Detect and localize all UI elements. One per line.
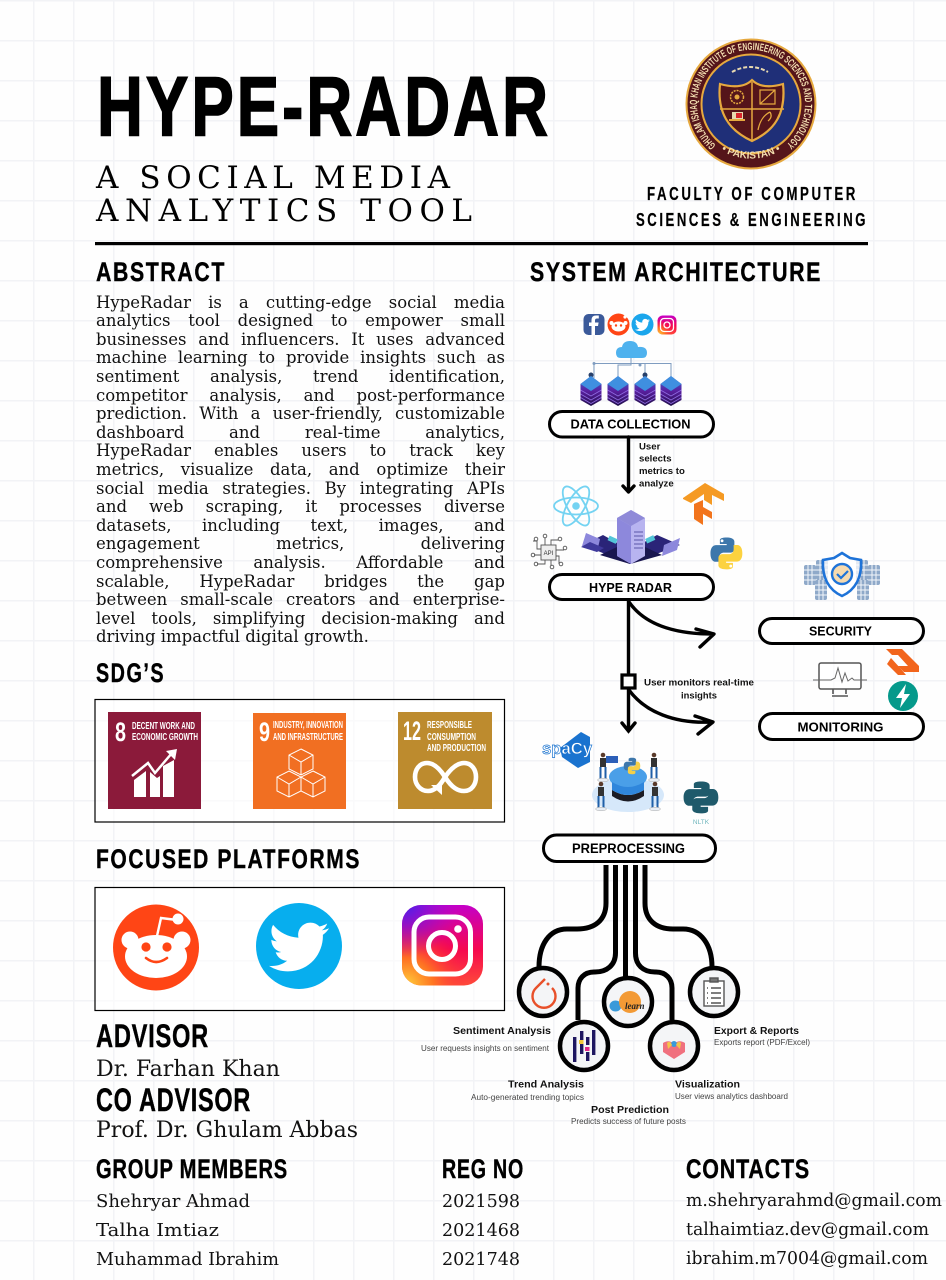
abstract text: machine learning to provide insights such as: [96, 348, 505, 367]
group members: Shehryar Ahmad: [96, 1191, 250, 1212]
SDG 9 tile: [253, 713, 346, 809]
heading: system architecture: SYSTEM ARCHITECTURE: [530, 257, 822, 287]
abstract text: HypeRadar enables users to track key: [96, 441, 505, 460]
header divider: [95, 242, 868, 245]
pill: security: [760, 618, 924, 644]
pill: data collection: DATA COLLECTION: [570, 416, 690, 432]
SDG 8 tile: ECONOMIC GROWTH: [132, 732, 198, 743]
university logo: • PAKISTAN •: [722, 147, 780, 159]
university logo: GHULAM ISHAQ KHAN INSTITUTE OF ENGINEERING SCIENCES AND TECHNOLOGY: [690, 42, 812, 150]
icon: NLTK: [684, 781, 718, 826]
abstract text: driving impactful digital growth.: [96, 627, 369, 646]
icon: fastapi: [888, 681, 918, 711]
registration numbers: [442, 1154, 524, 1270]
node marker: [622, 675, 635, 688]
output: export and reports: Exports report (PDF/Excel): [714, 1038, 810, 1047]
arrow note: user selects metrics: metrics to: [639, 466, 685, 477]
icon: reddit: [113, 904, 199, 990]
SDG 12 tile: 12: [403, 716, 421, 746]
output: post prediction: Post Prediction: [591, 1104, 669, 1116]
icon: API chip: [531, 534, 567, 569]
co advisor: Prof. Dr. Ghulam Abbas: [96, 1118, 358, 1143]
abstract text: prediction. With a user-friendly, customizable: [96, 404, 505, 423]
title: HYPE-RADAR: [97, 60, 551, 154]
abstract text: scalable, HypeRadar bridges the gap: [96, 572, 505, 591]
output: export and reports: Export & Reports: [714, 1025, 799, 1037]
SDG 8 tile: 8: [115, 717, 126, 747]
SDG 9 tile: INDUSTRY, INNOVATION: [273, 720, 343, 731]
contacts: [686, 1154, 942, 1269]
registration numbers: 2021748: [442, 1249, 520, 1270]
panel: focused platforms: [95, 888, 504, 1010]
subtitle: ANALYTICS TOOL: [95, 193, 472, 229]
abstract text: engagement metrics, delivering: [96, 534, 505, 553]
contacts: m.shehryarahmd@gmail.com: [686, 1190, 942, 1211]
abstract text: and web scraping, it processes diverse: [96, 497, 505, 516]
icon: scikit-learn: [610, 991, 645, 1013]
SDG 8 tile: DECENT WORK AND: [132, 721, 195, 732]
icon: dashboard book: [663, 1041, 685, 1059]
abstract text: level tools, simplifying decision-making and: [96, 609, 505, 628]
icon: central server: [581, 510, 680, 564]
arrow note: user selects metrics: [639, 442, 685, 490]
group members: Muhammad Ibrahim: [96, 1249, 279, 1270]
heading: SDGs: SDG’S: [96, 658, 165, 688]
faculty name: FACULTY OF COMPUTER: [647, 184, 858, 204]
group members: Talha Imtiaz: [96, 1220, 219, 1241]
pill: security: SECURITY: [809, 624, 872, 638]
SDG 8 tile: [108, 712, 201, 809]
abstract text: datasets, including text, images, and: [96, 516, 505, 535]
icon: python: [710, 537, 742, 569]
abstract text: analytics tool designed to empower small: [96, 311, 505, 330]
icon: websocket: [886, 649, 919, 675]
co advisor: CO ADVISOR: [96, 1082, 251, 1118]
advisor: [96, 1018, 280, 1082]
contacts: talhaimtiaz.dev@gmail.com: [686, 1219, 929, 1240]
panel: SDG goals: [95, 700, 504, 822]
abstract text: [96, 293, 505, 646]
icon: pytorch: [532, 979, 556, 1008]
co advisor: [96, 1082, 358, 1143]
icon: API chip: API: [544, 551, 554, 557]
SDG 9 tile: 9: [259, 717, 270, 747]
pill: preprocessing: PREPROCESSING: [572, 841, 685, 856]
abstract text: metrics, visualize data, and optimize their: [96, 460, 505, 479]
icon: spacy: spaCy: [542, 739, 593, 758]
contacts: CONTACTS: [686, 1154, 810, 1184]
abstract text: sentiment analysis, trend identification,: [96, 367, 505, 386]
SDG 12 tile: RESPONSIBLE: [427, 720, 472, 731]
faculty name: SCIENCES & ENGINEERING: [636, 210, 868, 230]
output: sentiment analysis: User requests insights on sentiment: [421, 1044, 550, 1053]
output: trend analysis: [471, 1022, 608, 1102]
faculty name: [636, 184, 868, 230]
abstract text: comprehensive analysis. Affordable and: [96, 553, 505, 572]
abstract text: between small-scale creators and enterprise-: [96, 590, 505, 609]
icon: scikit-learn: learn: [625, 1001, 645, 1011]
registration numbers: 2021598: [442, 1191, 520, 1212]
abstract text: competitor analysis, and post-performance: [96, 386, 505, 405]
abstract text: businesses and influencers. It uses advanced: [96, 330, 505, 349]
icon: react: [554, 483, 598, 529]
abstract text: HypeRadar is a cutting-edge social media: [96, 293, 505, 312]
icon: clipboard: [704, 978, 724, 1006]
arrows: hype radar branches: [622, 600, 714, 734]
icons: social sources: [584, 314, 676, 336]
arrow note: user monitors: User monitors real-time: [644, 678, 754, 688]
output: trend analysis: Trend Analysis: [508, 1078, 584, 1090]
icon: cloud and servers: [580, 341, 682, 406]
arrow note: user selects metrics: analyze: [639, 478, 674, 490]
connectors: preprocessing to outputs: [539, 865, 712, 1020]
output: visualization: User views analytics dashboard: [675, 1092, 788, 1101]
pill: data collection: [550, 412, 714, 437]
icon: bars: [573, 1030, 595, 1062]
contacts: ibrahim.m7004@gmail.com: [686, 1248, 928, 1269]
arrow note: user selects metrics: selects: [639, 454, 672, 464]
icon: twitter: [256, 903, 342, 989]
subtitle: [95, 160, 472, 229]
output: export and reports: [690, 968, 810, 1047]
advisor: ADVISOR: [96, 1018, 209, 1054]
arrow: data collection to hype radar: [623, 437, 634, 492]
pill: monitoring: MONITORING: [798, 720, 884, 734]
pill: hype radar: [550, 574, 714, 600]
pill: hype radar: HYPE RADAR: [589, 580, 673, 595]
icon: spacy: [542, 732, 593, 768]
arrow note: user monitors: [644, 678, 754, 702]
icon: instagram: [402, 905, 483, 986]
icon: NLTK: NLTK: [693, 819, 710, 826]
abstract text: social media strategies. By integrating APIs: [96, 479, 505, 498]
SDG 9 tile: AND INFRASTRUCTURE: [273, 732, 343, 743]
output: post prediction: [571, 978, 686, 1126]
subtitle: A SOCIAL MEDIA: [95, 160, 451, 196]
icon: security shield: [804, 553, 880, 600]
output: post prediction: Predicts success of future posts: [571, 1117, 686, 1126]
abstract text: dashboard and real-time analytics,: [96, 423, 505, 442]
icon: tensorflow: [683, 483, 724, 525]
output: visualization: Visualization: [675, 1078, 740, 1090]
output: trend analysis: Auto-generated trending topics: [471, 1093, 584, 1102]
advisor: Dr. Farhan Khan: [96, 1057, 280, 1082]
registration numbers: 2021468: [442, 1220, 520, 1241]
output: visualization: [650, 1022, 788, 1101]
arrow note: user selects metrics: User: [639, 442, 661, 452]
heading: abstract: ABSTRACT: [96, 257, 226, 287]
heading: focused platforms: FOCUSED PLATFORMS: [96, 844, 361, 874]
group members: GROUP MEMBERS: [96, 1154, 288, 1184]
arrow note: user monitors: insights: [681, 690, 717, 702]
pill: monitoring: [760, 714, 924, 740]
pill: preprocessing: [544, 835, 716, 862]
output: sentiment analysis: Sentiment Analysis: [453, 1025, 551, 1037]
registration numbers: REG NO: [442, 1154, 524, 1184]
icon: monitor: [813, 663, 867, 696]
output: sentiment analysis: [421, 968, 567, 1053]
SDG 12 tile: [398, 712, 492, 809]
icon: data team: [592, 753, 664, 812]
group members: [96, 1154, 288, 1270]
SDG 12 tile: CONSUMPTION: [427, 732, 476, 743]
SDG 12 tile: AND PRODUCTION: [427, 743, 486, 754]
